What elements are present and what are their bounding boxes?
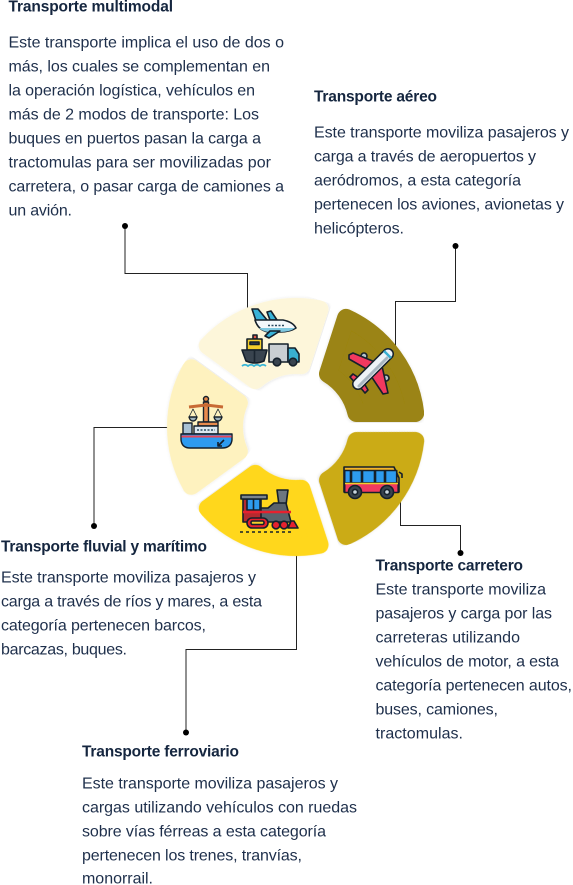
body: multimodal: más, los cuales se complementan en <box>8 58 270 76</box>
icon: train <box>240 490 298 532</box>
icon: plane <box>349 351 391 394</box>
connector: carretero <box>400 495 464 556</box>
ring segment: aereo <box>328 318 415 413</box>
body: ferroviario: pertenecen los trenes, tranvías, <box>82 848 302 864</box>
body: carretero: pasajeros y carga por las <box>376 606 552 622</box>
body: aereo: pertenecen los aviones, avionetas y <box>314 196 564 214</box>
body: ferroviario: Este transporte moviliza pasajeros y <box>82 776 338 792</box>
connector: ferroviario <box>183 545 296 736</box>
body: aereo <box>314 124 569 238</box>
body: fluvial: categoría pertenecen barcos, <box>1 618 206 634</box>
icon: ship with scales <box>181 396 232 448</box>
ring segment: carretero <box>319 424 437 536</box>
body: multimodal: buques en puertos pasan la carga a <box>8 130 261 148</box>
body: multimodal <box>8 34 284 220</box>
icon: bus <box>344 467 402 498</box>
body: carretero: categoría pertenecen autos, <box>376 678 572 694</box>
body: aereo: Este transporte moviliza pasajeros y <box>314 124 569 142</box>
body: carretero: vehículos de motor, a esta <box>376 654 559 670</box>
connector: aereo <box>396 243 458 350</box>
body: multimodal: un avión. <box>8 202 72 220</box>
body: fluvial: barcazas, buques. <box>1 642 127 658</box>
connector: multimodal <box>122 223 248 312</box>
body: ferroviario: sobre vías férreas a esta categoría <box>82 824 326 840</box>
icon: multimodal plane, ship and truck <box>242 309 299 366</box>
body: carretero: Este transporte moviliza <box>376 582 546 598</box>
body: multimodal: más de 2 modos de transporte: Los <box>8 106 259 124</box>
text block: multimodal <box>8 0 284 220</box>
body: fluvial: carga a través de ríos y mares, a esta <box>1 594 262 610</box>
body: carretero <box>376 582 572 742</box>
body: ferroviario <box>82 776 357 885</box>
ring segment: multimodal <box>202 280 320 392</box>
ring segment: fluvial <box>135 368 262 496</box>
body: aereo: aeródromos, a esta categoría <box>314 172 521 190</box>
body: aereo: helicópteros. <box>314 220 404 238</box>
text block: carretero <box>376 558 572 742</box>
body: carretero: buses, camiones, <box>376 702 498 718</box>
heading: carretero: Transporte carretero <box>376 558 523 574</box>
heading: aereo: Transporte aéreo <box>314 88 437 106</box>
heading: ferroviario: Transporte ferroviario <box>82 744 239 760</box>
body: multimodal: carretera, o pasar carga de camiones a <box>8 178 284 196</box>
body: multimodal: tractomulas para ser movilizadas por <box>8 154 272 172</box>
body: multimodal: la operación logística, vehículos en <box>8 82 255 100</box>
text block: fluvial <box>1 538 262 658</box>
heading: fluvial: Transporte fluvial y marítimo <box>1 538 207 556</box>
body: ferroviario: cargas utilizando vehículos con ruedas <box>82 800 357 816</box>
body: carretero: tractomulas. <box>376 726 463 742</box>
ring segment: ferroviario <box>208 457 334 585</box>
connector: fluvial <box>91 428 175 529</box>
body: multimodal: Este transporte implica el uso de dos o <box>8 34 284 52</box>
text block: ferroviario <box>82 744 357 885</box>
body: carretero: carreteras utilizando <box>376 630 520 646</box>
body: fluvial: Este transporte moviliza pasajeros y <box>1 570 256 586</box>
text block: aereo <box>314 88 569 238</box>
body: fluvial <box>1 570 262 658</box>
body: aereo: carga a través de aeropuertos y <box>314 148 536 166</box>
